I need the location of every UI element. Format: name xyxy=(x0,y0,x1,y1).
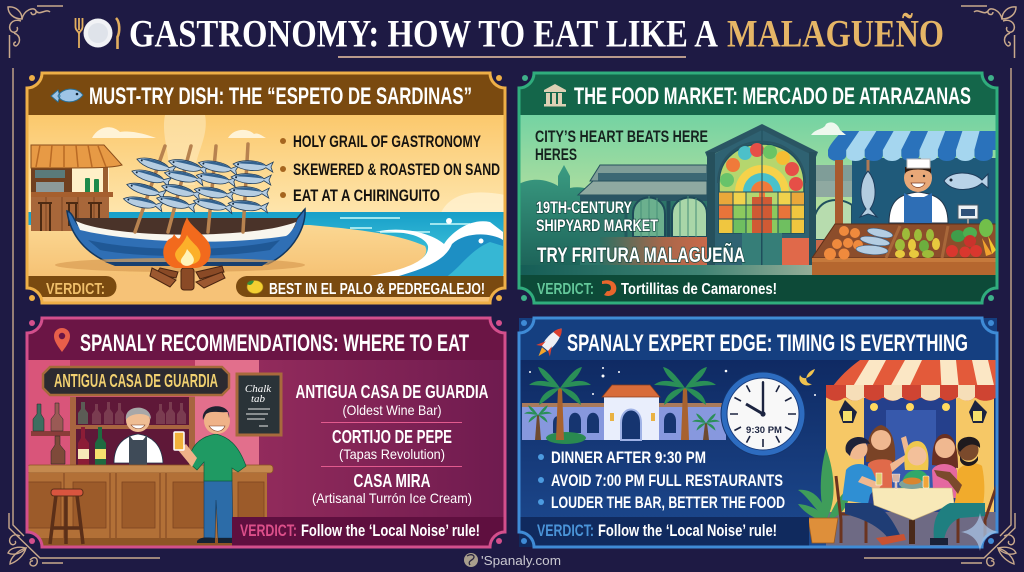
sardine skewers xyxy=(122,144,273,232)
bullet list xyxy=(280,136,500,201)
bullet list xyxy=(538,448,785,512)
bullet list: DINNER AFTER 9:30 PM xyxy=(551,448,706,467)
illustration background: beach xyxy=(27,115,505,303)
verdict bar xyxy=(519,275,997,303)
verdict bar: VERDICT: xyxy=(240,522,297,540)
bullet list: LOUDER THE BAR, BETTER THE FOOD xyxy=(551,493,785,512)
produce counter xyxy=(812,219,997,275)
panel heading: MUST-TRY DISH: THE “ESPETO DE SARDINAS” xyxy=(89,83,472,110)
panel header bar xyxy=(519,73,997,115)
verdict label: VERDICT: xyxy=(46,281,105,298)
recommendation list: CORTIJO DE PEPE xyxy=(332,427,452,447)
market text: heart of the city: HERES xyxy=(535,145,577,164)
icon: beach hut xyxy=(31,145,122,231)
chalkboard: Chalk xyxy=(245,383,272,395)
market hall building xyxy=(519,165,852,275)
awning xyxy=(826,360,997,401)
bullet list: HOLY GRAIL OF GASTRONOMY xyxy=(293,132,481,151)
icon: plate and cutlery xyxy=(76,18,119,49)
hanging fish xyxy=(860,160,877,217)
shop sign xyxy=(43,367,229,395)
awning xyxy=(828,131,997,161)
title xyxy=(76,12,944,56)
panel: recommendations xyxy=(27,318,505,547)
lanterns xyxy=(839,400,987,423)
recommendation list: (Tapas Revolution) xyxy=(339,446,445,462)
decorative sparkle xyxy=(961,513,999,551)
chalkboard: tab xyxy=(251,393,266,405)
bullet list: EAT AT A CHIRINGUITO xyxy=(293,186,440,205)
title text: GASTRONOMY: HOW TO EAT LIKE A xyxy=(129,12,718,56)
panel header bar xyxy=(27,318,505,360)
panel: expert edge xyxy=(519,318,1000,547)
bar stool xyxy=(50,489,83,544)
panel heading: SPANALY RECOMMENDATIONS: WHERE TO EAT xyxy=(80,330,469,357)
title highlight word: MALAGUEÑO xyxy=(727,12,944,56)
diner: blonde xyxy=(901,441,930,488)
diner: blue shirt xyxy=(842,437,906,545)
market text: fritura: TRY FRITURA MALAGUEÑA xyxy=(537,244,745,267)
panel: must-try dish xyxy=(27,73,505,303)
scale xyxy=(958,205,978,225)
verdict text xyxy=(236,276,505,298)
market text: shipyard: 19TH-CENTURY xyxy=(536,198,632,217)
panel header bar xyxy=(27,73,505,115)
verdict bar: Follow the ‘Local Noise’ rule! xyxy=(301,522,480,540)
potted plant xyxy=(798,448,850,543)
diners at table xyxy=(836,425,1000,545)
market text: heart of the city: CITY’S HEART BEATS HERE xyxy=(535,127,708,146)
palms xyxy=(524,367,720,440)
bullet list: AVOID 7:00 PM FULL RESTAURANTS xyxy=(551,471,783,490)
fish stall xyxy=(812,131,997,275)
diner: yellow shirt xyxy=(930,437,985,545)
verdict bar xyxy=(232,517,505,547)
panel background xyxy=(519,360,997,547)
verdict bar: VERDICT: xyxy=(537,522,594,540)
panel: food market xyxy=(519,73,997,303)
icon: moon xyxy=(799,369,815,385)
cafe terrace xyxy=(826,360,997,547)
recommendation list: (Oldest Wine Bar) xyxy=(342,402,442,418)
stained glass entrance xyxy=(705,124,818,265)
recommendation list: CASA MIRA xyxy=(354,471,430,491)
shop sign: ANTIGUA CASA DE GUARDIA xyxy=(54,371,218,391)
icon: market temple xyxy=(544,84,566,106)
title underline xyxy=(338,56,686,58)
verdict bar xyxy=(519,517,809,547)
verdict label xyxy=(27,276,116,298)
bar counter xyxy=(27,465,273,547)
market text: heart of the city xyxy=(536,130,708,160)
icon: campfire xyxy=(150,217,225,290)
chalkboard xyxy=(237,374,281,435)
market text: shipyard: SHIPYARD MARKET xyxy=(536,216,658,235)
chairs xyxy=(836,476,1000,543)
icon: rocket xyxy=(532,323,569,362)
back shelf xyxy=(31,397,195,467)
customer with beer xyxy=(174,406,246,543)
icon: fish xyxy=(51,89,83,102)
sky cloud xyxy=(811,122,846,135)
icon: boat xyxy=(55,209,305,272)
bar scene xyxy=(27,360,281,547)
footer logo: 'Spanaly.com xyxy=(481,553,561,568)
verdict bar: Follow the ‘Local Noise’ rule! xyxy=(598,522,777,540)
illustration background: sky xyxy=(520,115,996,210)
market text: shipyard xyxy=(536,200,658,232)
diner: standing woman xyxy=(866,425,911,490)
town night scene xyxy=(522,367,816,444)
bartender xyxy=(114,408,163,465)
recommendation list xyxy=(296,382,488,506)
verdict bar: Tortillitas de Camarones! xyxy=(621,281,777,298)
icon: location pin xyxy=(54,328,70,352)
diner: pink shirt xyxy=(932,434,958,498)
recommendation list: ANTIGUA CASA DE GUARDIA xyxy=(296,382,488,402)
icon: wave xyxy=(370,218,503,276)
verdict text: BEST IN EL PALO & PEDREGALEJO! xyxy=(269,281,485,298)
fish on wall xyxy=(944,173,988,190)
verdict bar: VERDICT: xyxy=(537,281,594,298)
icon: shrimp xyxy=(602,280,616,296)
bullet list: SKEWERED & ROASTED ON SAND xyxy=(293,160,500,179)
clock xyxy=(721,372,805,456)
recommendation list: (Artisanal Turrón Ice Cream) xyxy=(312,490,472,506)
clock: 9:30 PM xyxy=(746,425,782,436)
fishmonger xyxy=(889,159,948,223)
panel background xyxy=(259,360,504,517)
table with cloth xyxy=(872,473,954,544)
panel header bar xyxy=(519,318,997,360)
